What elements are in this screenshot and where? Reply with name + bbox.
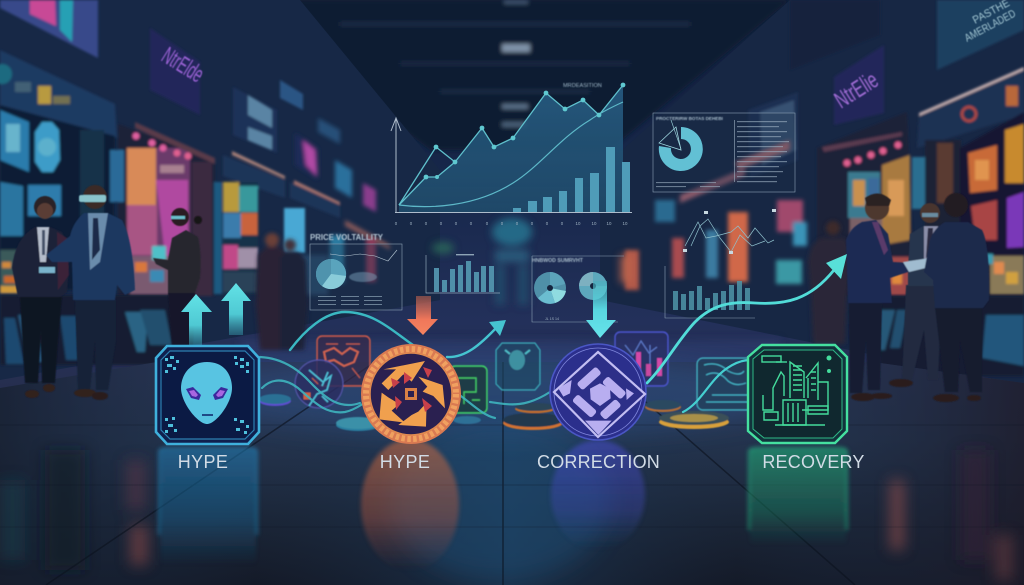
main area and bar chart — [391, 83, 632, 226]
icon: purple diamond coin — [550, 344, 646, 440]
chart label: MRDEASITION — [563, 83, 602, 89]
label: recovery: RECOVERY — [762, 452, 865, 472]
icon: orange arrows coin — [361, 344, 461, 444]
token: alien panel — [496, 343, 540, 390]
people: foreground left — [12, 185, 202, 400]
person with dark hair — [153, 208, 202, 345]
axis ticks: 0 — [531, 221, 534, 226]
corner pixels — [165, 356, 249, 434]
label: hype second: HYPE — [380, 452, 430, 472]
axis ticks: 0 — [546, 221, 549, 226]
token: red panel — [317, 336, 370, 386]
small annotation: JL 1S 14 — [545, 317, 559, 321]
floor — [0, 355, 1024, 585]
small bar chart — [426, 254, 500, 293]
right line chart — [683, 209, 776, 254]
bars — [513, 147, 630, 212]
blurred map shape — [349, 272, 377, 282]
panel heading: HNBWOD SUMRVHT — [532, 258, 584, 264]
panel frame — [310, 244, 402, 310]
panel: donut summary — [653, 113, 795, 192]
pie chart left — [534, 272, 566, 304]
axis ticks: 0 — [501, 221, 504, 226]
left counter — [0, 295, 175, 365]
diamond segments — [558, 366, 634, 435]
panel: market summary — [532, 256, 624, 322]
icon: alien token — [156, 346, 259, 444]
panel: price volatility — [310, 233, 402, 310]
table rows — [656, 120, 789, 187]
people: background figures — [256, 221, 850, 350]
icon: recovery circuit city — [748, 345, 847, 443]
reflection: purple coin — [551, 440, 645, 550]
person with headset — [46, 185, 135, 400]
axis ticks: 0 — [410, 221, 413, 226]
panel frame — [653, 113, 795, 192]
left wall — [0, 0, 1024, 385]
axis ticks: 0 — [470, 221, 473, 226]
reflection: alien token — [159, 448, 257, 565]
axis ticks — [395, 221, 628, 226]
axis ticks: 10 — [592, 221, 597, 226]
token: blue coin — [295, 360, 343, 408]
icon: arrow down cyan — [586, 281, 616, 338]
pie chart right — [579, 272, 607, 300]
axis ticks: 0 — [395, 221, 398, 226]
area — [399, 85, 623, 212]
alien head — [181, 362, 232, 424]
reflection: recovery token — [749, 448, 847, 545]
alien eyes — [186, 387, 228, 400]
token: disks — [259, 394, 729, 431]
axis ticks: 0 — [440, 221, 443, 226]
person behind — [889, 203, 949, 387]
ceiling — [210, 0, 790, 150]
person reading tablet — [846, 193, 914, 401]
small line — [330, 250, 397, 261]
central glow — [240, 218, 780, 370]
right wall — [600, 0, 1024, 385]
token: purple chart panel — [615, 332, 668, 386]
reflections — [159, 439, 847, 571]
label: hype first: HYPE — [178, 452, 228, 472]
axis ticks: 0 — [561, 221, 564, 226]
sign text: left: NtrElde — [157, 42, 208, 88]
token: green panel — [450, 366, 487, 413]
axis ticks: 10 — [623, 221, 628, 226]
token: teal circuit panel — [697, 358, 759, 410]
person from the back — [924, 193, 989, 402]
axis ticks: 0 — [486, 221, 489, 226]
smooth trend line — [399, 102, 623, 207]
right counter — [880, 296, 1024, 376]
sign text: right: NtrElie — [830, 67, 883, 114]
axis ticks: 10 — [576, 221, 581, 226]
axis ticks: 0 — [455, 221, 458, 226]
axes — [391, 118, 632, 212]
donut chart — [659, 120, 703, 171]
city lines — [762, 356, 828, 425]
four swirling arrows — [379, 361, 445, 427]
reflection: orange coin — [361, 439, 459, 571]
icon: arrow down orange — [407, 296, 438, 335]
coin center marks — [391, 367, 432, 412]
label: correction: CORRECTION — [537, 452, 660, 472]
wave arrow: recovery rise — [647, 254, 847, 412]
panel heading: PROCTERIRW BOTAS DEHEBI — [656, 116, 723, 121]
jagged line with markers — [399, 83, 625, 205]
panel frame — [532, 256, 624, 322]
wave lines between tokens — [260, 357, 550, 418]
person with tablet — [12, 196, 69, 398]
panel heading: PRICE VOLTALLITY — [310, 233, 384, 242]
right bar chart — [665, 266, 755, 318]
warm floor reflections — [0, 450, 1013, 580]
axis ticks: 0 — [425, 221, 428, 226]
tablet pair — [903, 258, 934, 272]
wave arrow: first rise — [290, 312, 506, 357]
people: foreground right — [846, 193, 989, 402]
axis ticks: 0 — [516, 221, 519, 226]
small tokens behind the wave — [259, 332, 759, 431]
pie chart — [316, 259, 346, 289]
icon: arrow up left — [181, 294, 212, 346]
axis ticks: 10 — [607, 221, 612, 226]
icon: arrow up right — [221, 283, 251, 335]
alien mouth — [202, 414, 213, 416]
small legend rows — [318, 296, 382, 305]
